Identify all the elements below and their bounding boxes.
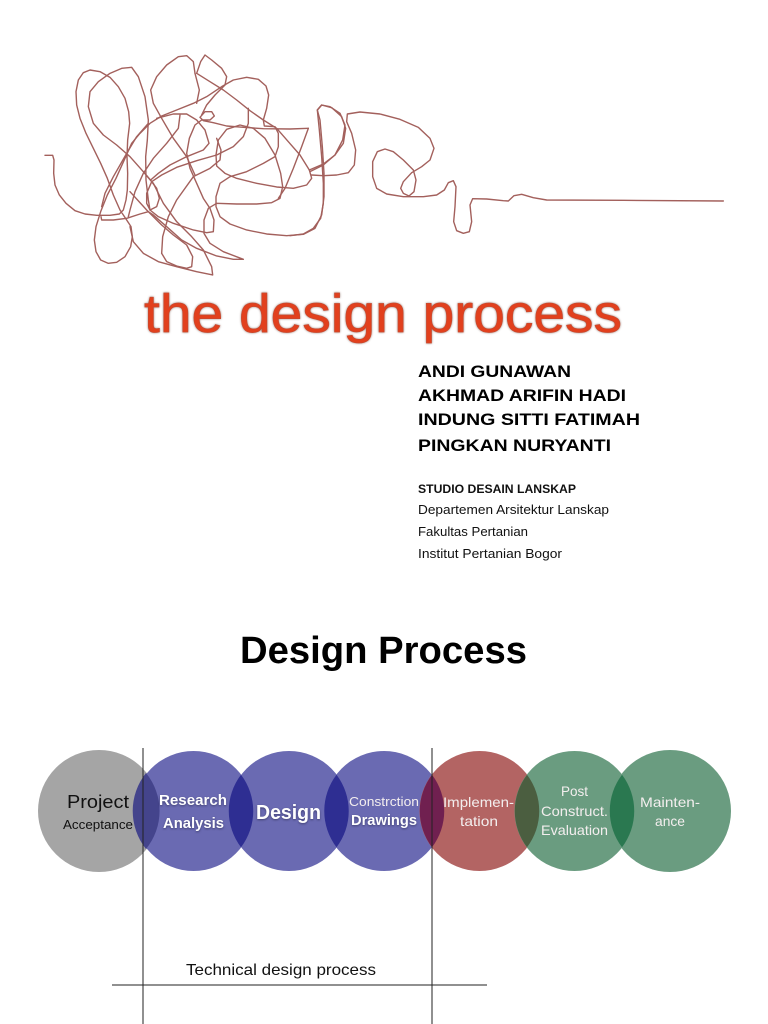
circle labels: Research xyxy=(159,793,227,809)
overlap: implementation and evaluation xyxy=(515,775,539,847)
circle labels: Mainten- xyxy=(640,794,700,810)
bracket lines: technical design process xyxy=(112,748,487,1024)
circle: Maintenance xyxy=(609,750,731,872)
circle: Research Analysis xyxy=(134,751,254,871)
affiliation text: Institut Pertanian Bogor xyxy=(418,546,563,561)
circle labels: Evaluation xyxy=(541,822,608,838)
circle labels: Implemen- xyxy=(443,794,514,810)
affiliation text: STUDIO DESAIN LANSKAP xyxy=(418,482,576,496)
circle labels: tation xyxy=(460,813,498,829)
circle: Post Construct. Evaluation xyxy=(514,751,634,871)
circle labels: Design xyxy=(256,802,321,824)
circle: Construction Drawings xyxy=(324,751,444,871)
authors list: INDUNG SITTI FATIMAH xyxy=(418,411,640,429)
circle labels: Construct. xyxy=(541,803,608,819)
authors list: ANDI GUNAWAN xyxy=(418,363,571,381)
overlap: design and drawings xyxy=(324,775,349,847)
overlap: evaluation and maintenance xyxy=(610,775,634,847)
circle labels: Acceptance xyxy=(63,817,133,832)
process circles xyxy=(38,750,731,872)
circle labels xyxy=(63,783,700,838)
authors list xyxy=(418,363,640,455)
circle labels: Analysis xyxy=(163,816,224,832)
scribble illustration xyxy=(45,55,723,275)
overlap: project and research xyxy=(133,773,160,849)
circle: Design xyxy=(229,751,349,871)
affiliation text: Departemen Arsitektur Lanskap xyxy=(418,502,609,517)
overlap: research and design xyxy=(229,775,253,847)
circle labels: Drawings xyxy=(351,813,417,829)
affiliation text: Fakultas Pertanian xyxy=(418,524,528,539)
circle labels: ance xyxy=(655,813,685,829)
overlap: drawings and implementation xyxy=(420,775,444,847)
title: the design process: the design process xyxy=(144,284,622,344)
circle labels: Project xyxy=(67,791,129,812)
authors list: PINGKAN NURYANTI xyxy=(418,437,611,455)
affiliation text xyxy=(418,482,609,561)
label: Technical design process: Technical design process xyxy=(186,962,376,979)
circle: Implementation xyxy=(420,751,540,871)
heading: Design Process: Design Process xyxy=(240,630,527,672)
circle labels: Post xyxy=(561,783,588,799)
authors list: AKHMAD ARIFIN HADI xyxy=(418,387,626,405)
circle labels: Constrction xyxy=(349,795,419,809)
circle: Project Acceptance xyxy=(38,750,160,872)
